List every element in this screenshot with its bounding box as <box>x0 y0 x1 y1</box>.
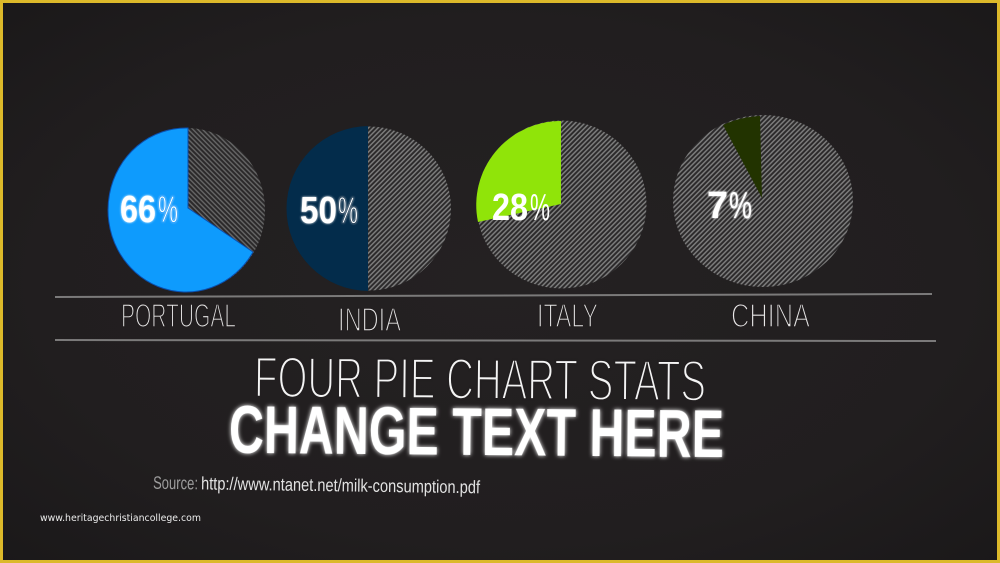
value: 7% <box>707 185 752 227</box>
pie chart: Portugal 66% <box>108 128 265 292</box>
value: 28%: 28 <box>492 187 528 229</box>
source line <box>153 473 481 497</box>
subtitle: change text here: CHANGE TEXT HERE <box>229 392 724 472</box>
label: Portugal: PORTUGAL <box>121 297 236 334</box>
label: India: INDIA <box>338 301 401 338</box>
pie chart: China 7% <box>673 115 853 287</box>
label: China: CHINA <box>731 297 810 334</box>
source line: Source: <box>153 473 198 493</box>
value: 66%: % <box>158 189 178 231</box>
divider line: top <box>55 294 932 297</box>
pie chart: India 50% <box>286 126 452 291</box>
value: 28%: % <box>530 187 550 229</box>
pie chart: Italy 28% <box>476 120 646 288</box>
label: Italy: ITALY <box>537 297 598 334</box>
title: four pie chart stats: FOUR PIE CHART STATS <box>254 345 706 414</box>
value: 7%: 7 <box>707 185 728 227</box>
divider line: bottom <box>55 340 936 341</box>
value: 66%: 66 <box>120 189 156 231</box>
value: 7%: % <box>729 185 752 227</box>
value: 50%: 50 <box>300 190 337 232</box>
watermark url: www.heritagechristiancollege.com <box>40 513 201 524</box>
value: 50%: % <box>338 190 358 232</box>
source line: http://www.ntanet.net/milk-consumption.pdf <box>201 473 481 497</box>
